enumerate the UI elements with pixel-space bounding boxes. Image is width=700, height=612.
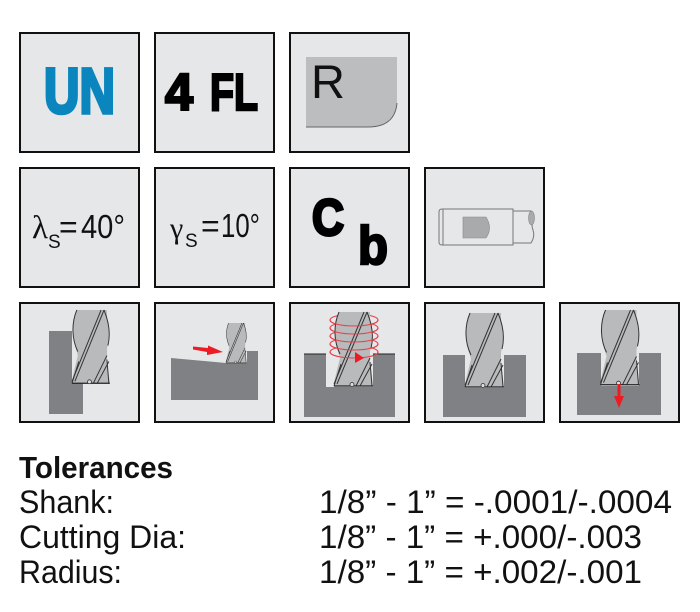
icon: slotting	[425, 303, 544, 422]
row: cutting diameter tolerance	[19, 519, 642, 555]
icon: 4 flutes badge: FL	[210, 64, 258, 122]
row: radius tolerance: Radius:	[19, 554, 122, 590]
text block: tolerances	[19, 450, 672, 590]
icon: rake angle 10 degrees: S	[185, 231, 198, 252]
icon: helix angle 40 degrees: =	[59, 209, 78, 245]
icon: corner radius badge: R	[311, 55, 345, 108]
icon: ramping	[155, 303, 274, 422]
icon: corner radius badge	[290, 33, 409, 152]
arrow: plunge direction	[614, 384, 624, 408]
icon: Cb cutting edge badge: b	[358, 216, 388, 276]
icon: Cb cutting edge badge: C	[312, 189, 344, 246]
icon: rake angle 10 degrees	[155, 168, 274, 287]
icon: rake angle 10 degrees: 10°	[221, 207, 260, 244]
icon: 4 flutes badge	[155, 33, 274, 152]
icon: helix angle 40 degrees: S	[48, 232, 61, 253]
icon: helix angle 40 degrees	[20, 168, 139, 287]
icon: helix angle 40 degrees: 40°	[81, 208, 125, 245]
icon: 4 flutes badge: 4	[165, 64, 193, 122]
icon: plunging	[560, 303, 679, 422]
row: cutting diameter tolerance: 1/8” - 1” = +.000/-.003	[319, 519, 642, 555]
icon: Cb cutting edge badge	[290, 168, 409, 287]
heading: tolerances: Tolerances	[19, 450, 173, 485]
icon: Weldon shank	[425, 168, 544, 287]
icon: side milling	[20, 303, 139, 422]
row: radius tolerance: 1/8” - 1” = +.002/-.001	[319, 554, 642, 590]
row: shank tolerance: Shank:	[19, 484, 114, 520]
icon: rake angle 10 degrees: =	[201, 208, 220, 244]
icon: UN coating badge: UN	[44, 55, 115, 127]
icon: rake angle 10 degrees: γ	[169, 212, 183, 245]
row: radius tolerance	[19, 554, 642, 590]
icon: helix angle 40 degrees: λ	[32, 210, 48, 246]
row: shank tolerance: 1/8” - 1” = -.0001/-.0004	[319, 484, 672, 520]
icon: helical interpolation	[290, 303, 409, 422]
arrow: helical direction	[355, 352, 364, 363]
row: shank tolerance	[19, 484, 672, 520]
arrow: feed direction	[193, 346, 223, 355]
row: cutting diameter tolerance: Cutting Dia:	[19, 519, 186, 555]
icon: UN coating badge	[20, 33, 139, 152]
